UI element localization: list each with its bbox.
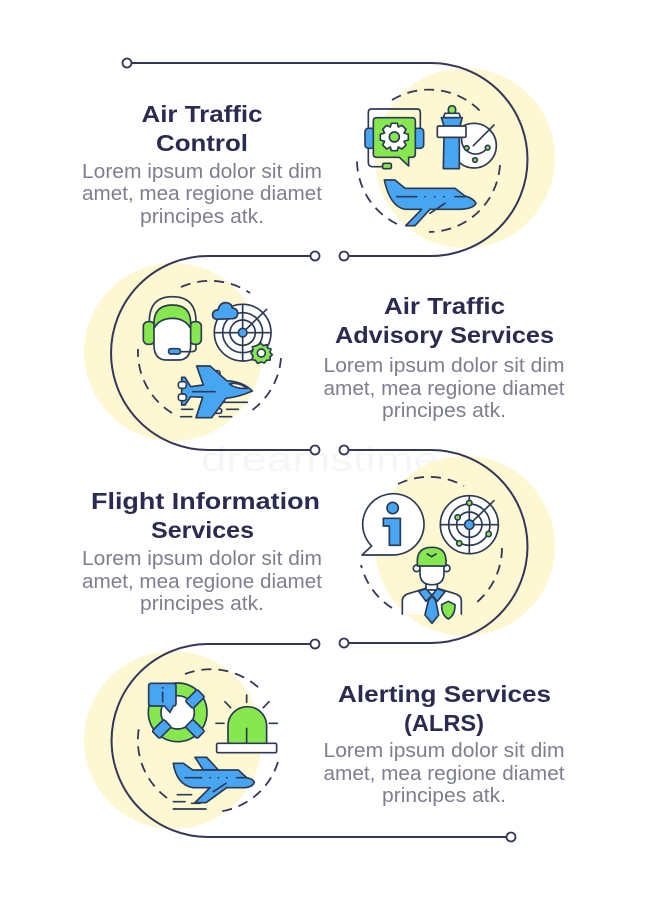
text block: amet, mea regione diamet <box>82 183 322 205</box>
heading <box>91 488 320 543</box>
connector line <box>112 644 506 837</box>
icons: alerting <box>148 683 277 809</box>
icon: radar <box>213 303 272 363</box>
start node <box>310 252 320 260</box>
end node <box>310 446 320 454</box>
icons: advisory services <box>143 297 272 418</box>
heading: Air Traffic <box>142 101 263 127</box>
icons: air traffic control <box>365 106 496 226</box>
icon: life ring <box>148 683 207 742</box>
end node <box>340 638 348 648</box>
icon: siren <box>216 695 277 753</box>
heading: Alerting Services <box>338 681 551 707</box>
icon: officer <box>402 547 461 623</box>
heading: Services <box>151 517 254 543</box>
yellow blob <box>84 651 262 829</box>
icons: flight information <box>362 494 498 623</box>
panel: flight information services <box>82 446 555 648</box>
heading <box>142 101 263 156</box>
start node <box>340 446 348 454</box>
text block <box>324 355 565 422</box>
icon: airplane <box>384 180 476 226</box>
yellow blob <box>375 68 555 248</box>
watermark: dreamstime <box>201 441 439 479</box>
heading <box>335 293 554 348</box>
dashed ring <box>361 477 502 608</box>
dashed ring <box>138 669 278 812</box>
icon: fighter jet <box>178 366 252 418</box>
connector line <box>132 63 528 256</box>
heading <box>338 681 551 736</box>
dashed ring <box>357 90 500 232</box>
heading: Advisory Services <box>335 322 554 348</box>
text block: Lorem ipsum dolor sit dim <box>82 548 322 570</box>
heading: Air Traffic <box>384 293 505 319</box>
text block: principes atk. <box>382 400 506 422</box>
icon: radar <box>452 123 496 168</box>
icon: control tower <box>437 106 466 169</box>
connector line <box>111 256 310 450</box>
heading: Control <box>156 130 248 156</box>
icon: headset <box>365 109 424 169</box>
connector line <box>349 450 528 643</box>
text block: amet, mea regione diamet <box>324 378 565 400</box>
start node <box>310 640 320 648</box>
heading: Flight Information <box>91 488 320 514</box>
text block: Lorem ipsum dolor sit dim <box>82 161 322 183</box>
end node <box>340 252 348 260</box>
text block: principes atk. <box>382 785 506 807</box>
heading: (ALRS) <box>404 710 484 736</box>
text block <box>324 740 565 807</box>
start node <box>122 58 132 68</box>
panel: alerting services <box>84 640 565 842</box>
text block <box>82 548 322 615</box>
text block: principes atk. <box>140 593 264 615</box>
icon: pilot headset <box>143 297 201 360</box>
yellow blob <box>84 263 262 441</box>
text block: principes atk. <box>140 206 264 228</box>
yellow blob <box>375 456 555 636</box>
text block <box>82 161 322 228</box>
text block: Lorem ipsum dolor sit dim <box>324 740 564 762</box>
text block: Lorem ipsum dolor sit dim <box>324 355 564 377</box>
dashed ring <box>138 281 281 413</box>
panel: air traffic control <box>82 58 555 260</box>
text block: amet, mea regione diamet <box>82 571 322 593</box>
icon: info bubble <box>362 494 424 555</box>
panel: air traffic advisory services <box>84 252 565 454</box>
icon: radar <box>440 496 498 554</box>
text block: amet, mea regione diamet <box>324 763 565 785</box>
end node <box>506 832 516 842</box>
icon: airplane <box>173 757 254 809</box>
